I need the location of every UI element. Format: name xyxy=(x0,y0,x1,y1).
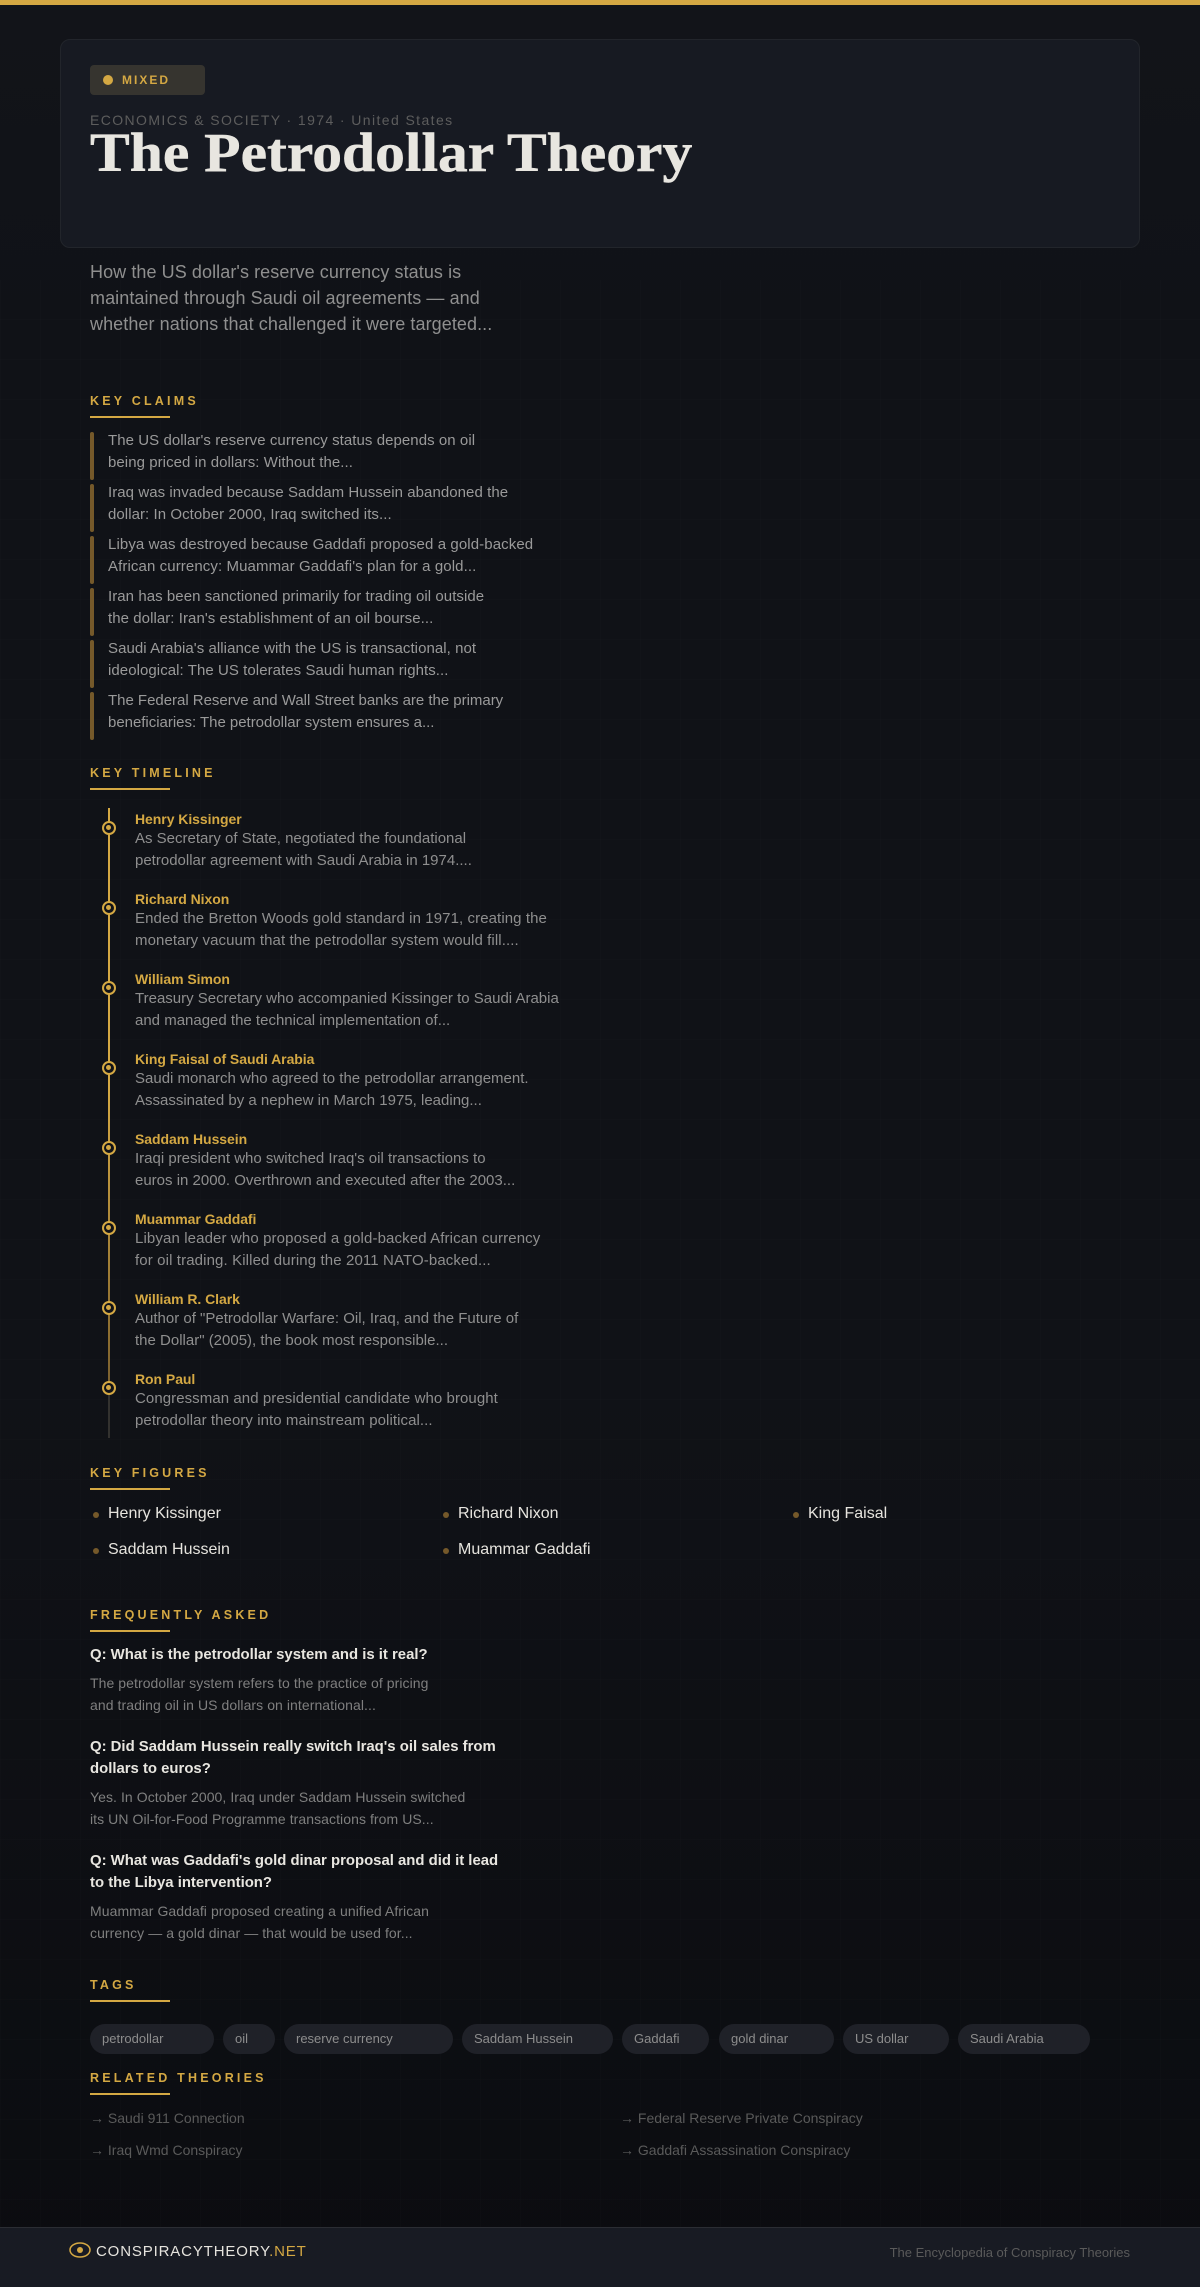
tag: US dollar xyxy=(843,2024,949,2054)
tag: reserve currency: reserve currency xyxy=(296,2031,393,2046)
footer logo text: CONSPIRACYTHEORY.NET xyxy=(96,2243,307,2260)
claim 1: being priced in dollars: Without the... xyxy=(108,454,353,471)
badge: mixed xyxy=(90,65,205,95)
faq 3 question: to the Libya intervention? xyxy=(90,1875,272,1891)
figure: Henry Kissinger: Henry Kissinger xyxy=(108,1505,221,1522)
faq 1 answer xyxy=(90,1675,429,1713)
event: King Faisal: King Faisal of Saudi Arabia xyxy=(135,1051,314,1067)
event: Ron Paul: Congressman and presidential candidate who brought xyxy=(135,1390,498,1407)
claim 2: dollar: In October 2000, Iraq switched its... xyxy=(108,506,392,523)
tag: petrodollar: petrodollar xyxy=(102,2031,163,2046)
claim 2 xyxy=(90,484,508,532)
intro text xyxy=(90,262,492,334)
event: Muammar Gaddafi: for oil trading. Killed during the 2011 NATO-backed... xyxy=(135,1252,491,1269)
claim 6 xyxy=(90,692,503,740)
title: The Petrodollar Theory xyxy=(90,122,692,183)
event: William R. Clark: Author of "Petrodollar Warfare: Oil, Iraq, and the Future of xyxy=(135,1310,518,1327)
faq 3 answer xyxy=(90,1903,429,1941)
event: Saddam Hussein: Saddam Hussein xyxy=(135,1131,247,1147)
tag: oil xyxy=(223,2024,275,2054)
event: William Simon: and managed the technical implementation of... xyxy=(135,1012,450,1029)
claim 3 xyxy=(90,536,533,584)
event: Richard Nixon: Ended the Bretton Woods gold standard in 1971, creating the xyxy=(135,910,547,927)
faq 1 question: Q: What is the petrodollar system and is it real? xyxy=(90,1647,428,1663)
timeline line xyxy=(108,808,110,1438)
event: King Faisal: Assassinated by a nephew in March 1975, leading... xyxy=(135,1092,482,1109)
tag: oil: oil xyxy=(235,2031,248,2046)
event: Henry Kissinger: As Secretary of State, negotiated the foundational xyxy=(135,830,466,847)
tag: Saddam Hussein xyxy=(462,2024,613,2054)
claim 3: African currency: Muammar Gaddafi's plan for a gold... xyxy=(108,558,476,575)
event: King Faisal: Saudi monarch who agreed to the petrodollar arrangement. xyxy=(135,1070,529,1087)
category line: ECONOMICS & SOCIETY · 1974 · United States xyxy=(90,112,454,128)
claim 5: ideological: The US tolerates Saudi human rights... xyxy=(108,662,448,679)
badge label: MIXED xyxy=(122,73,170,87)
claim 6: beneficiaries: The petrodollar system ensures a... xyxy=(108,714,434,731)
event: Muammar Gaddafi xyxy=(102,1211,540,1269)
faq 2 answer: Yes. In October 2000, Iraq under Saddam Hussein switched xyxy=(90,1789,465,1805)
tag: gold dinar: gold dinar xyxy=(731,2031,788,2046)
tag: gold dinar xyxy=(719,2024,834,2054)
event: William R. Clark: William R. Clark xyxy=(135,1291,240,1307)
event: William Simon: William Simon xyxy=(135,971,230,987)
figure: King Faisal: King Faisal xyxy=(808,1505,887,1522)
related: Gaddafi Assassination Conspiracy: → Gaddafi Assassination Conspiracy xyxy=(620,2142,850,2158)
event: Henry Kissinger: Henry Kissinger xyxy=(135,811,242,827)
related: Saudi 911 Connection: → Saudi 911 Connection xyxy=(90,2110,245,2126)
event: Henry Kissinger: petrodollar agreement with Saudi Arabia in 1974.... xyxy=(135,852,472,869)
event: William Simon: Treasury Secretary who accompanied Kissinger to Saudi Arabia xyxy=(135,990,559,1007)
faq 3 answer: Muammar Gaddafi proposed creating a unified African xyxy=(90,1903,429,1919)
claim 4: Iran has been sanctioned primarily for trading oil outside xyxy=(108,588,484,605)
tag: Saddam Hussein: Saddam Hussein xyxy=(474,2031,573,2046)
heading: frequently asked: FREQUENTLY ASKED xyxy=(90,1608,271,1622)
figure: Muammar Gaddafi: Muammar Gaddafi xyxy=(458,1541,590,1558)
faq 3 question: Q: What was Gaddafi's gold dinar proposal and did it lead xyxy=(90,1853,498,1869)
heading: tags: TAGS xyxy=(90,1978,137,1992)
tag: Gaddafi xyxy=(622,2024,709,2054)
faq 2 answer xyxy=(90,1789,465,1827)
related: Iraq Wmd Conspiracy: → Iraq Wmd Conspiracy xyxy=(90,2142,242,2158)
faq 2 question: dollars to euros? xyxy=(90,1761,211,1777)
claim 5: Saudi Arabia's alliance with the US is transactional, not xyxy=(108,640,476,657)
icon: badge dot xyxy=(103,75,113,85)
event: Richard Nixon: monetary vacuum that the petrodollar system would fill.... xyxy=(135,932,519,949)
faq 3 question xyxy=(90,1853,498,1891)
panel: hero xyxy=(60,39,1140,248)
heading: key timeline: KEY TIMELINE xyxy=(90,766,216,780)
intro text: maintained through Saudi oil agreements — and xyxy=(90,288,480,308)
faq 2 answer: its UN Oil-for-Food Programme transactions from US... xyxy=(90,1811,434,1827)
icon: eye logo xyxy=(69,2242,91,2258)
footer xyxy=(0,2227,1200,2287)
event: William R. Clark xyxy=(102,1291,518,1349)
heading: related theories: RELATED THEORIES xyxy=(90,2071,267,2085)
tag: Gaddafi: Gaddafi xyxy=(634,2031,680,2046)
heading: key figures: KEY FIGURES xyxy=(90,1466,210,1480)
footer tagline: The Encyclopedia of Conspiracy Theories xyxy=(890,2245,1130,2260)
faq 2 question xyxy=(90,1739,496,1777)
event: King Faisal xyxy=(102,1051,529,1109)
event: Ron Paul: petrodollar theory into mainstream political... xyxy=(135,1412,433,1429)
claim 1: The US dollar's reserve currency status depends on oil xyxy=(108,432,475,449)
faq 1 answer: The petrodollar system refers to the practice of pricing xyxy=(90,1675,429,1691)
claim 2: Iraq was invaded because Saddam Hussein abandoned the xyxy=(108,484,508,501)
tag: petrodollar xyxy=(90,2024,214,2054)
claim 5 xyxy=(90,640,476,688)
timeline xyxy=(102,811,559,1429)
claim 4 xyxy=(90,588,484,636)
event: William R. Clark: the Dollar" (2005), the book most responsible... xyxy=(135,1332,448,1349)
claim 3: Libya was destroyed because Gaddafi proposed a gold-backed xyxy=(108,536,533,553)
claim 6: The Federal Reserve and Wall Street banks are the primary xyxy=(108,692,503,709)
faq 3 answer: currency — a gold dinar — that would be used for... xyxy=(90,1925,413,1941)
event: Muammar Gaddafi: Muammar Gaddafi xyxy=(135,1211,256,1227)
tag: Saudi Arabia: Saudi Arabia xyxy=(970,2031,1044,2046)
key figures list xyxy=(93,1505,887,1558)
heading: key claims: KEY CLAIMS xyxy=(90,394,199,408)
event: Ron Paul: Ron Paul xyxy=(135,1371,195,1387)
event: William Simon xyxy=(102,971,559,1029)
claim 1 xyxy=(90,432,475,480)
top accent bar xyxy=(0,0,1200,5)
tag: reserve currency xyxy=(284,2024,453,2054)
faq 1 answer: and trading oil in US dollars on international... xyxy=(90,1697,376,1713)
event: Richard Nixon xyxy=(102,891,547,949)
figure: Saddam Hussein: Saddam Hussein xyxy=(108,1541,230,1558)
event: Muammar Gaddafi: Libyan leader who proposed a gold-backed African currency xyxy=(135,1230,540,1247)
related: Federal Reserve Private Conspiracy: → Federal Reserve Private Conspiracy xyxy=(620,2110,863,2126)
intro text: How the US dollar's reserve currency status is xyxy=(90,262,461,282)
event: Ron Paul xyxy=(102,1371,498,1429)
figure: Richard Nixon: Richard Nixon xyxy=(458,1505,558,1522)
faq 2 question: Q: Did Saddam Hussein really switch Iraq's oil sales from xyxy=(90,1739,496,1755)
event: Saddam Hussein: euros in 2000. Overthrown and executed after the 2003... xyxy=(135,1172,515,1189)
claim 4: the dollar: Iran's establishment of an oil bourse... xyxy=(108,610,433,627)
event: Saddam Hussein xyxy=(102,1131,515,1189)
event: Saddam Hussein: Iraqi president who switched Iraq's oil transactions to xyxy=(135,1150,486,1167)
event: Richard Nixon: Richard Nixon xyxy=(135,891,229,907)
claims list xyxy=(90,432,533,740)
intro text: whether nations that challenged it were targeted... xyxy=(90,314,492,334)
tag: Saudi Arabia xyxy=(958,2024,1090,2054)
tag: US dollar: US dollar xyxy=(855,2031,908,2046)
event: Henry Kissinger xyxy=(102,811,472,869)
